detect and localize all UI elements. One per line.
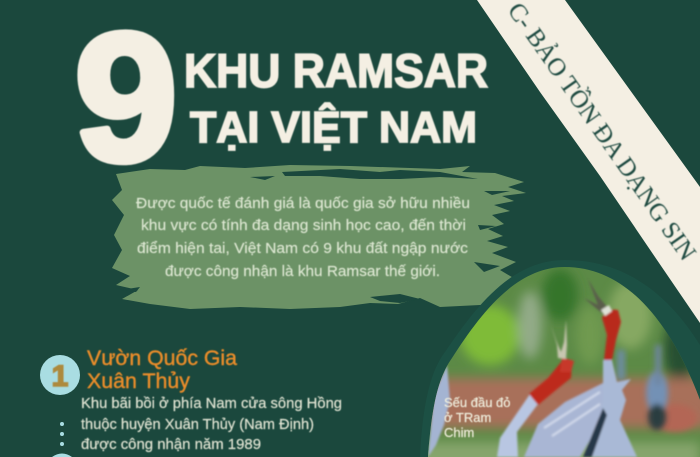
background crane [646, 345, 668, 430]
intro paragraph [136, 195, 470, 280]
intro paragraph: Được quốc tế đánh giá là quốc gia sở hữu nhiều [136, 195, 470, 212]
item 1: number badge [40, 355, 80, 395]
left crane [524, 383, 604, 457]
item 1: description: Khu bãi bồi ở phía Nam cửa sông Hồng [81, 396, 342, 412]
photo caption: Sếu đầu đỏ [444, 395, 511, 410]
title: TẠI VIỆT NAM [190, 102, 477, 152]
connector dots [60, 422, 64, 446]
intro paragraph: điểm hiện tai, Việt Nam có 9 khu đất ngập nước [137, 240, 469, 257]
right crane [590, 360, 637, 457]
photo caption: Chim [444, 425, 474, 440]
item 1: heading: Vườn Quốc Gia [87, 347, 237, 370]
title: KHU RAMSAR [184, 44, 488, 97]
photo frame ring [420, 260, 700, 457]
item 2: number badge (cropped) [52, 454, 72, 457]
intro paragraph: khu vực có tính đa dạng sinh học cao, đến thời [141, 217, 466, 234]
photo caption [444, 395, 511, 440]
item 1: description: được công nhận năm 1989 [81, 437, 261, 453]
item 1: description: thuộc huyện Xuân Thủy (Nam Định) [81, 417, 314, 433]
intro paragraph: được công nhận là khu Ramsar thế giới. [165, 263, 440, 280]
photo caption: ở TRam [444, 410, 491, 425]
banner text: C- BẢO TỒN ĐA DẠNG SIN [502, 0, 700, 266]
item 1: number badge: 1 [52, 360, 68, 393]
photo: sarus cranes [420, 260, 700, 457]
item 1: heading [87, 347, 237, 393]
big number 9: 9 [74, 0, 178, 199]
item 1: heading: Xuân Thủy [87, 370, 191, 393]
title [184, 44, 488, 152]
brush stroke panel [112, 165, 526, 309]
diagonal banner [477, 0, 700, 323]
item 1: description [81, 396, 342, 453]
